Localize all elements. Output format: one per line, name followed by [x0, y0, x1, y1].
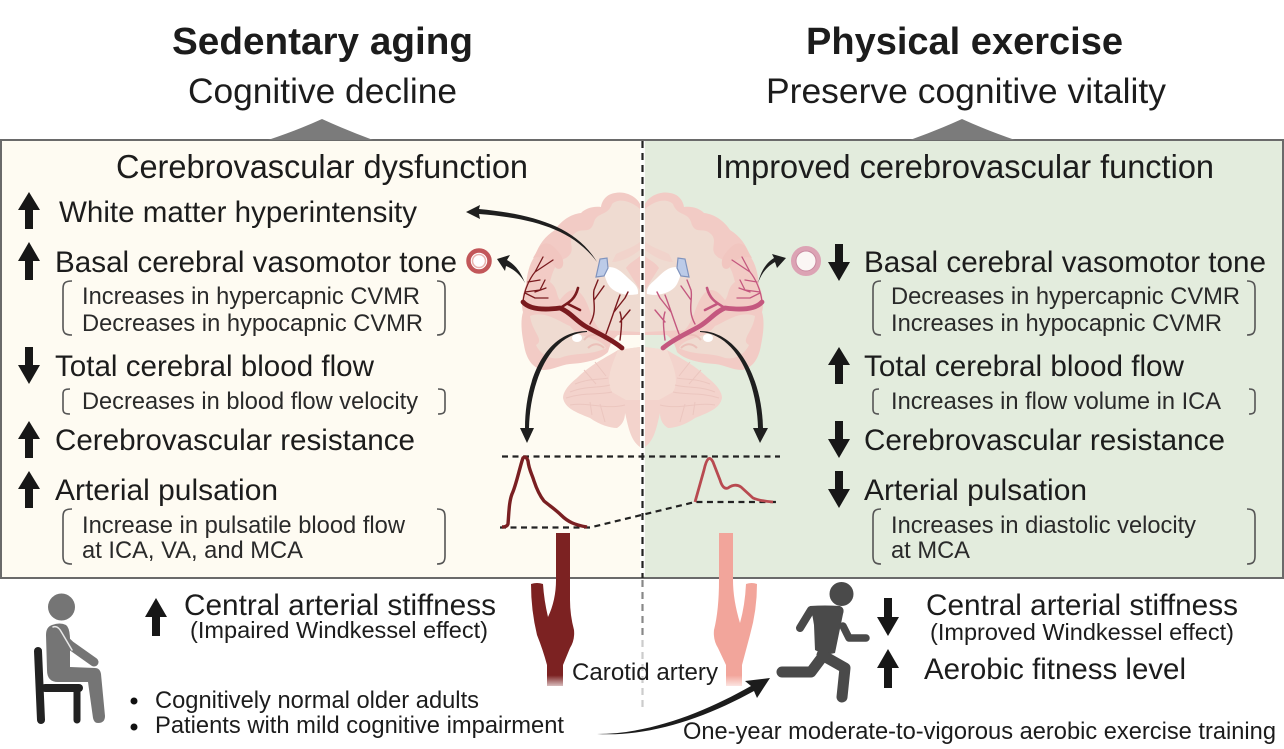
text: arterial pulsation: Arterial pulsation [55, 474, 278, 507]
text: aerobic fitness level: Aerobic fitness level [924, 653, 1186, 686]
text: total cerebral blood flow: Total cerebral blood flow [864, 350, 1185, 383]
label: carotid artery: Carotid artery [572, 659, 718, 686]
text: increases in hypocapnic CVMR: Increases in hypocapnic CVMR [891, 311, 1222, 337]
icon: up arrow [18, 471, 40, 508]
icon: running person [782, 582, 866, 697]
icon: up arrow [877, 649, 899, 688]
text: decreases in hypocapnic CVMR: Decreases in hypocapnic CVMR [82, 311, 423, 337]
text: exercise training caption: One-year moderate-to-vigorous aerobic exercise training [683, 719, 1276, 745]
bracket group: velocity [63, 389, 445, 414]
text: total cerebral blood flow: Total cerebral blood flow [55, 350, 375, 383]
arrow: to healthy vessel [758, 254, 786, 283]
arteries: stiff dark red vessels [523, 257, 630, 348]
text: improved Windkessel effect: (Improved Windkessel effect) [930, 619, 1234, 645]
icon: left pointer triangle [268, 119, 373, 140]
arrow: to white matter hyperintensity [466, 205, 597, 262]
icon: down arrow [18, 347, 40, 384]
panel: sedentary aging background [2, 140, 642, 578]
icon: up arrow [18, 192, 40, 229]
bracket group: CVMR [873, 281, 1255, 335]
arrow: to stiff vessel [497, 255, 525, 283]
brain: right half [645, 193, 764, 447]
icon: healthy vessel cross-section [794, 248, 818, 274]
text: increases in diastolic velocity: Increases in diastolic velocity [891, 513, 1196, 539]
bracket group: flow volume [873, 389, 1255, 414]
text: cerebrovascular resistance: Cerebrovascular resistance [55, 424, 415, 457]
text: arterial pulsation: Arterial pulsation [864, 474, 1087, 507]
text: impaired Windkessel effect: (Impaired Windkessel effect) [190, 617, 488, 643]
text: increases in flow volume in ICA: Increases in flow volume in ICA [891, 389, 1221, 415]
text: decreases in hypercapnic CVMR: Decreases in hypercapnic CVMR [891, 284, 1240, 310]
icon: down arrow [828, 244, 850, 281]
icon: down arrow [877, 598, 899, 636]
brain: left half [521, 193, 640, 447]
chart: pulse waveforms [500, 456, 780, 528]
icon: seated person [38, 594, 105, 723]
subtitle: preserve cognitive vitality: Preserve cognitive vitality [766, 72, 1166, 111]
text: increase in pulsatile blood flow: Increase in pulsatile blood flow [82, 513, 406, 539]
illustration: stiff carotid artery [531, 533, 574, 686]
icon: right pointer triangle [910, 119, 1015, 140]
icon: down arrow [828, 471, 850, 508]
list: study populations: Patients with mild cognitive impairment [155, 713, 564, 739]
text: central arterial stiffness: Central arterial stiffness [926, 589, 1238, 622]
text: decreases in blood flow velocity: Decreases in blood flow velocity [82, 389, 418, 415]
list: study populations [130, 688, 564, 739]
icon: up arrow [828, 347, 850, 384]
waveform: healthy [695, 458, 773, 502]
divider: centre dashed line [641, 141, 644, 712]
icon: down arrow [828, 421, 850, 458]
icon: up arrow [18, 421, 40, 458]
heading: improved cerebrovascular function: Improved cerebrovascular function [715, 148, 1214, 185]
icon: stiff vessel cross-section [468, 250, 490, 272]
text: basal cerebral vasomotor tone: Basal cerebral vasomotor tone [864, 246, 1266, 279]
bracket group: diastolic [873, 509, 1255, 564]
panel: physical exercise background [642, 140, 1282, 578]
list: study populations: Cognitively normal older adults [155, 688, 479, 714]
arteries: healthy pink vessels [655, 257, 762, 348]
right column findings [828, 244, 1266, 564]
text: at ICA, VA, and MCA: at ICA, VA, and MCA [82, 538, 303, 564]
icon: up arrow [18, 242, 40, 280]
text: cerebrovascular resistance: Cerebrovascular resistance [864, 424, 1225, 457]
text: central arterial stiffness: Central arterial stiffness [184, 589, 496, 622]
bracket group: pulsatile [63, 509, 445, 564]
text: basal cerebral vasomotor tone: Basal cerebral vasomotor tone [55, 246, 457, 279]
title: physical exercise: Physical exercise [806, 21, 1123, 63]
heading: cerebrovascular dysfunction: Cerebrovascular dysfunction [116, 148, 528, 185]
left column findings [18, 192, 457, 564]
text: increases in hypercapnic CVMR: Increases in hypercapnic CVMR [82, 284, 420, 310]
text: at MCA: at MCA [891, 538, 970, 564]
arrow: right brain to waveform [700, 331, 768, 443]
icon: up arrow [145, 598, 167, 636]
text: white matter hyperintensity: White matter hyperintensity [59, 196, 417, 229]
waveform: stiff pulsatile [502, 457, 587, 527]
illustration: healthy carotid artery [714, 533, 757, 686]
title: sedentary aging: Sedentary aging [172, 21, 473, 63]
subtitle: cognitive decline: Cognitive decline [188, 72, 457, 111]
bracket group: CVMR [63, 281, 445, 335]
arrow: toward exercise training [597, 678, 770, 734]
arrow: left brain to waveform [520, 331, 587, 443]
